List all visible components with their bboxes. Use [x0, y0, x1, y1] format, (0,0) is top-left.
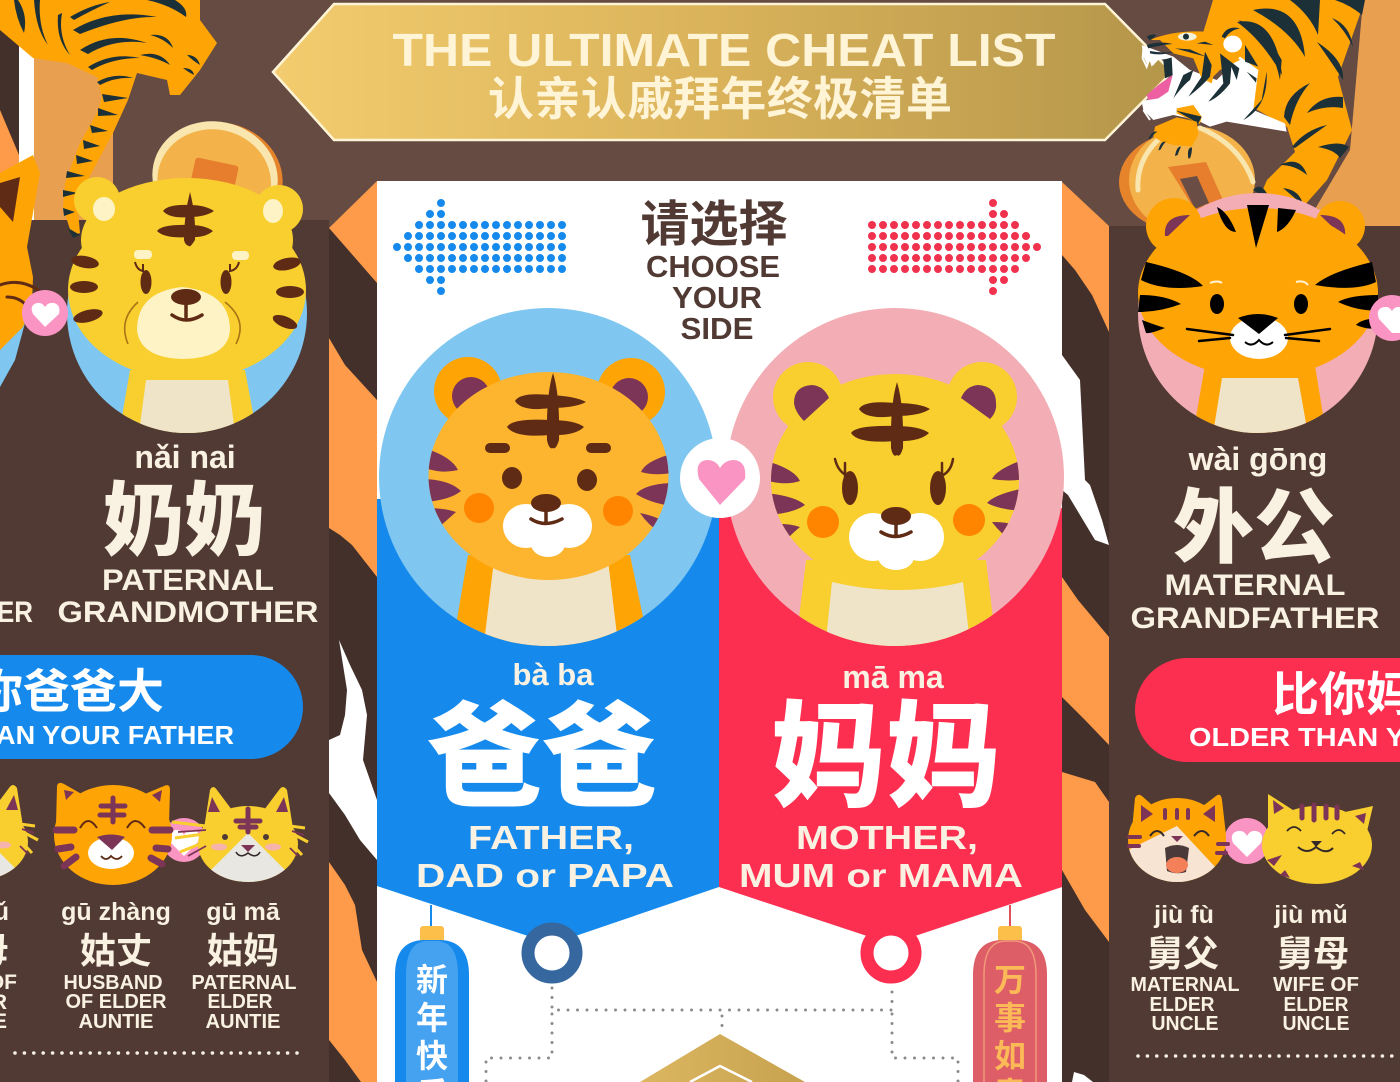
- label: jiu fu: [1130, 901, 1240, 1035]
- heart glyph left: [169, 830, 199, 856]
- label: jiu mu: ELDER: [1284, 994, 1349, 1016]
- icon: centre heart: [680, 438, 760, 518]
- label: jiu mu: jiù mǔ: [1273, 901, 1348, 929]
- father label: FATHER,: [468, 819, 634, 856]
- grandmother tiger portrait: [67, 177, 307, 440]
- father label: 爸爸: [427, 694, 657, 822]
- tiger tongue: [1147, 75, 1173, 100]
- gold title banner: 认亲认戚拜年终极清单: [488, 73, 952, 125]
- label: jiu fu: 舅父: [1147, 933, 1219, 974]
- label: gu ma: gū mā: [206, 898, 281, 926]
- father panel: blue banner: [377, 499, 719, 944]
- heading: choose your side: SIDE: [680, 311, 754, 346]
- right family panel: [1109, 226, 1400, 1082]
- dotted divider right: [1138, 1054, 1400, 1058]
- mother label: MUM or MAMA: [739, 857, 1023, 894]
- grandmother label: nǎi nai: [134, 439, 236, 475]
- grandfather label: GRANDFATHER: [1130, 602, 1380, 635]
- mother tiger portrait: [726, 308, 1064, 660]
- arrow: dotted red pointing right: [869, 203, 1037, 292]
- label: jiu mu: UNCLE: [1282, 1013, 1350, 1035]
- right tiger-stripe column: [1062, 182, 1109, 1082]
- heading: choose your side: 请选择: [640, 198, 788, 252]
- label: gu zhang: AUNTIE: [78, 1011, 154, 1033]
- grandfather label: 外公: [1173, 484, 1335, 574]
- label: gu ma: AUNTIE: [206, 1011, 280, 1033]
- red ring: [867, 929, 915, 977]
- cat: yellow tiger cat, gu ma: [172, 787, 308, 885]
- label: gu zhang: OF ELDER: [66, 991, 167, 1013]
- grandfather label: wài gōng: [1188, 441, 1327, 477]
- heart behind cats left: [162, 818, 206, 862]
- heading: choose your side: [640, 198, 788, 346]
- heading: choose your side: CHOOSE: [646, 249, 780, 284]
- father label: DAD or PAPA: [416, 857, 674, 894]
- red lantern: [973, 905, 1047, 1082]
- label: gu ma: PATERNAL: [192, 972, 296, 994]
- blue pill: older than your father: [0, 655, 303, 759]
- label: jiu fu: jiù fù: [1153, 901, 1214, 929]
- mother panel: red banner: [719, 508, 1062, 944]
- grandmother label: PATERNAL: [102, 564, 274, 597]
- illustration: leaping tiger top left: [0, 0, 217, 238]
- blue lantern: 新: [416, 962, 448, 998]
- mother label: MOTHER,: [796, 819, 978, 856]
- label: gu zhang: [61, 898, 171, 1033]
- tiger head top: [1150, 31, 1240, 83]
- grandfather label: MATERNAL: [1164, 569, 1346, 602]
- label: partial gu mu: [0, 898, 17, 1033]
- grandfather tiger portrait: [1138, 193, 1378, 440]
- blue lantern: 快: [416, 1038, 448, 1074]
- heart between cats right: [1224, 818, 1270, 864]
- top right wall panel: [1305, 0, 1400, 226]
- mother label: 妈妈: [771, 694, 1001, 822]
- label: jiu fu: UNCLE: [1152, 1013, 1218, 1035]
- cat: orange tiger, gu zhang: [54, 783, 172, 885]
- red lantern: 事: [994, 1000, 1026, 1036]
- father tiger portrait: [379, 308, 717, 660]
- dotted divider left: [15, 1051, 297, 1055]
- label: jiu fu: ELDER: [1150, 994, 1215, 1016]
- red lantern: 万: [994, 962, 1026, 998]
- tiger white jaw and chest: [1142, 45, 1287, 132]
- illustration: roaring tiger top right: [1142, 0, 1365, 207]
- central white card: [377, 181, 1062, 1082]
- grandmother label: [0, 439, 319, 629]
- partial tiger at left edge: [0, 155, 40, 387]
- cat: smiling yellow cat, jiu mu: [1262, 794, 1373, 884]
- gold title banner: [273, 4, 1172, 140]
- label: gu ma: ELDER: [208, 991, 273, 1013]
- father label: [416, 657, 674, 894]
- cat: partial yellow cat left edge: [0, 785, 38, 883]
- label: jiu mu: [1273, 901, 1359, 1035]
- grandmother label: 奶奶: [103, 477, 265, 567]
- label: gu zhang: gū zhàng: [61, 898, 171, 926]
- gold title banner: THE ULTIMATE CHEAT LIST: [392, 24, 1056, 76]
- left family panel: [0, 220, 329, 1082]
- mother label: mā ma: [842, 659, 944, 695]
- red pill: older than your mother: OLDER THAN Y: [1189, 722, 1400, 752]
- label: gu ma: [192, 898, 296, 1033]
- label: jiu fu: MATERNAL: [1130, 974, 1240, 996]
- dotted connector lines: [486, 988, 958, 1082]
- label: gu zhang: HUSBAND: [64, 972, 162, 994]
- blue lantern: 年: [416, 1000, 448, 1036]
- label: jiu mu: WIFE OF: [1273, 974, 1359, 996]
- blue ring: [528, 929, 576, 977]
- blue lantern: [395, 905, 469, 1082]
- icon: grandmother heart: [22, 290, 68, 336]
- label: gu zhang: 姑丈: [80, 930, 152, 971]
- cat: singing orange cat, jiu fu: [1122, 795, 1232, 885]
- label: gu ma: 姑妈: [207, 930, 279, 971]
- gold badge at bottom: [640, 1034, 805, 1082]
- red pill: older than your mother: [1135, 658, 1400, 762]
- icon: grandfather heart: [1369, 295, 1400, 341]
- red lantern: 如: [994, 1038, 1026, 1074]
- grandmother label: GRANDMOTHER: [58, 596, 319, 629]
- mother label: [739, 659, 1023, 894]
- father label: bà ba: [513, 657, 594, 692]
- grandfather label: [1130, 441, 1380, 635]
- arrow: dotted blue pointing left: [397, 203, 566, 292]
- coin right: [1119, 126, 1255, 234]
- top left wall panel: [0, 0, 113, 220]
- coin left: [142, 110, 293, 246]
- heading: choose your side: YOUR: [672, 280, 762, 315]
- left tiger-stripe column: [329, 181, 377, 1082]
- label: jiu mu: 舅母: [1277, 933, 1349, 974]
